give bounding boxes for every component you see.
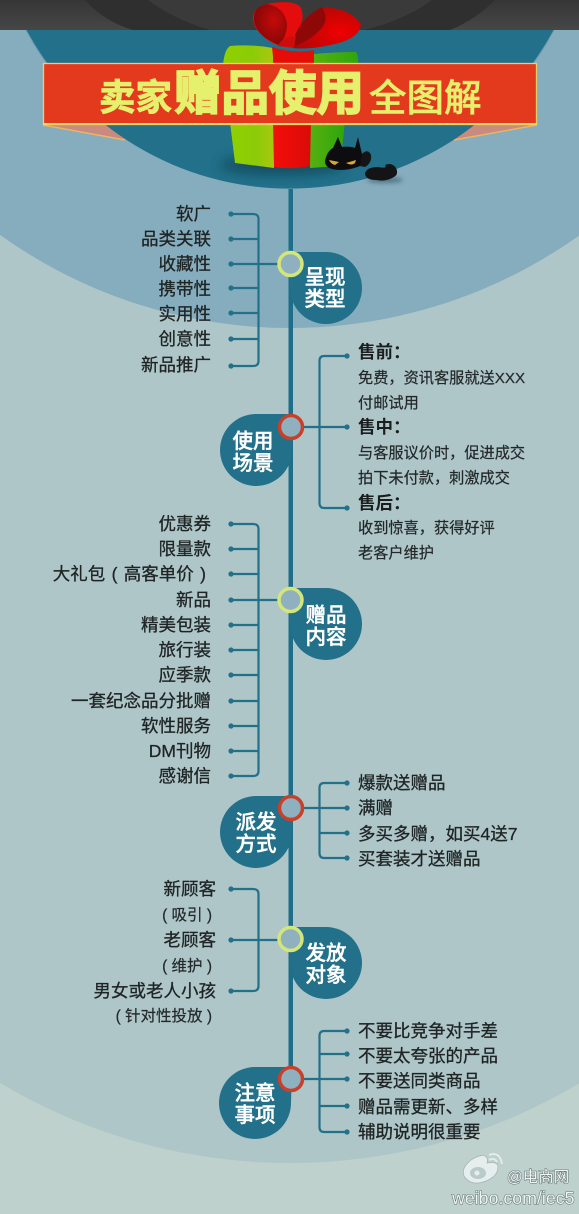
list text: 老顾客 (164, 930, 216, 950)
icon: weibo logo (463, 1154, 502, 1183)
connector (303, 1028, 350, 1135)
bubble: 派发方式: 派发 (236, 811, 276, 834)
list text (53, 514, 211, 786)
box right side (310, 122, 345, 168)
list text: 爆款送赠品 (358, 773, 446, 793)
bubble: 赠品内容: 内容 (306, 626, 346, 649)
bubble: 赠品内容 (279, 588, 362, 660)
lid right (314, 52, 358, 66)
list text: 一套纪念品分批赠 (71, 691, 211, 711)
after-sale text (358, 493, 495, 562)
list text (141, 204, 211, 375)
list text: 应季款 (158, 665, 211, 685)
connector (228, 521, 280, 779)
list text: DM刊物 (149, 741, 211, 761)
pre-sale text: 免费，资讯客服就送XXX (358, 370, 525, 387)
box ribbon (273, 122, 311, 168)
connector (303, 353, 350, 511)
watermark: weibo (451, 1154, 575, 1208)
list text: 买套装才送赠品 (358, 849, 480, 869)
list text: 赠品需更新、多样 (358, 1097, 498, 1117)
section: 使用场景 list (303, 342, 525, 562)
bubble: 注意事项: 事项 (234, 1104, 276, 1127)
section: 赠品内容 list (53, 514, 280, 786)
bubble: 发放对象: 发放 (306, 942, 346, 965)
after-sale text: 售后： (358, 493, 410, 513)
pre-sale text: 售前： (358, 342, 410, 362)
list text: 新品推广 (141, 355, 211, 375)
list text: 旅行装 (158, 640, 211, 660)
list text (358, 773, 517, 869)
list text: ( 吸引 ) (162, 906, 212, 924)
list text: 不要比竞争对手差 (358, 1021, 498, 1041)
section: 发放对象 list (94, 879, 280, 1025)
connector (228, 211, 280, 369)
bubble: 使用场景: 使用 (232, 430, 274, 453)
list text: 多买多赠，如买4送7 (358, 824, 517, 844)
watermark url: weibo.com/iec5 (451, 1188, 575, 1208)
watermark handle: @电商网 (507, 1168, 569, 1186)
lid left (223, 45, 273, 66)
section: 注意事项 list (303, 1021, 498, 1142)
list text: ( 维护 ) (162, 957, 212, 975)
mid-sale text (358, 417, 525, 487)
bubble: 注意事项 (219, 1067, 302, 1139)
banner title: 卖家 (99, 77, 172, 118)
after-sale text: 收到惊喜，获得好评 (358, 520, 495, 537)
timeline spine (288, 189, 293, 1079)
list text: 收藏性 (158, 254, 211, 274)
bubble: 派发方式: 方式 (236, 833, 276, 856)
list text: 男女或老人小孩 (94, 981, 216, 1001)
banner title: 赠品使用 (174, 68, 364, 121)
banner ribbon tails (26, 30, 554, 189)
bubble: 呈现类型: 呈现 (304, 266, 346, 289)
bubble: 发放对象 (279, 927, 362, 999)
connector (303, 780, 350, 861)
list text: 品类关联 (141, 229, 211, 249)
cat eyes (329, 160, 356, 165)
bow right loop (292, 7, 361, 48)
bubble: 使用场景 (220, 414, 302, 486)
icon: black cat (325, 137, 403, 183)
list text (358, 1021, 498, 1142)
box left side (230, 122, 274, 168)
list text: 携带性 (158, 279, 211, 299)
dark teal semicircle (26, 30, 554, 188)
bubble: 呈现类型: 类型 (304, 288, 346, 311)
bubble: 派发方式 (220, 796, 302, 868)
list text: 限量款 (158, 539, 211, 559)
list text: 软广 (176, 204, 211, 224)
bubble: 呈现类型 (279, 252, 362, 324)
pre-sale text: 付邮试用 (358, 395, 419, 412)
section: 呈现类型 list (141, 204, 280, 375)
banner title (99, 68, 482, 121)
after-sale text: 老客户维护 (358, 545, 434, 562)
list text: 感谢信 (158, 766, 211, 786)
lid ribbon (272, 47, 314, 66)
list text: 不要太夸张的产品 (358, 1046, 498, 1066)
dark top bar (0, 0, 579, 30)
list text: 辅助说明很重要 (358, 1122, 480, 1142)
bubble: 使用场景: 场景 (232, 452, 274, 475)
list text: 新顾客 (164, 879, 216, 899)
connector (228, 886, 280, 994)
list text: 新品 (176, 590, 211, 610)
bubble: 注意事项: 注意 (234, 1082, 276, 1105)
pre-sale text (358, 342, 525, 412)
bubble: 赠品内容: 赠品 (306, 604, 346, 627)
mid-sale text: 拍下未付款，刺激成交 (358, 469, 510, 487)
box shadow (220, 156, 344, 174)
bow knot (278, 36, 296, 48)
gift box (220, 2, 361, 174)
banner (43, 64, 537, 125)
list text: 大礼包 ( 高客单价 ) (53, 564, 206, 584)
list text: 满赠 (358, 798, 393, 818)
list text (94, 879, 216, 1025)
list text: 不要送同类商品 (358, 1071, 480, 1091)
bow left loop (253, 2, 303, 46)
bubble: 发放对象: 对象 (306, 964, 346, 987)
mid-sale text: 与客服议价时，促进成交 (358, 444, 525, 462)
section: 派发方式 list (303, 773, 517, 869)
banner title: 全图解 (369, 77, 482, 119)
list text: 软性服务 (141, 716, 211, 736)
list text: 实用性 (158, 304, 211, 324)
mid-sale text: 售中： (358, 417, 410, 437)
list text: 创意性 (158, 329, 211, 349)
list text: ( 针对性投放 ) (116, 1007, 212, 1025)
list text: 精美包装 (141, 615, 211, 635)
list text: 优惠券 (158, 514, 211, 534)
